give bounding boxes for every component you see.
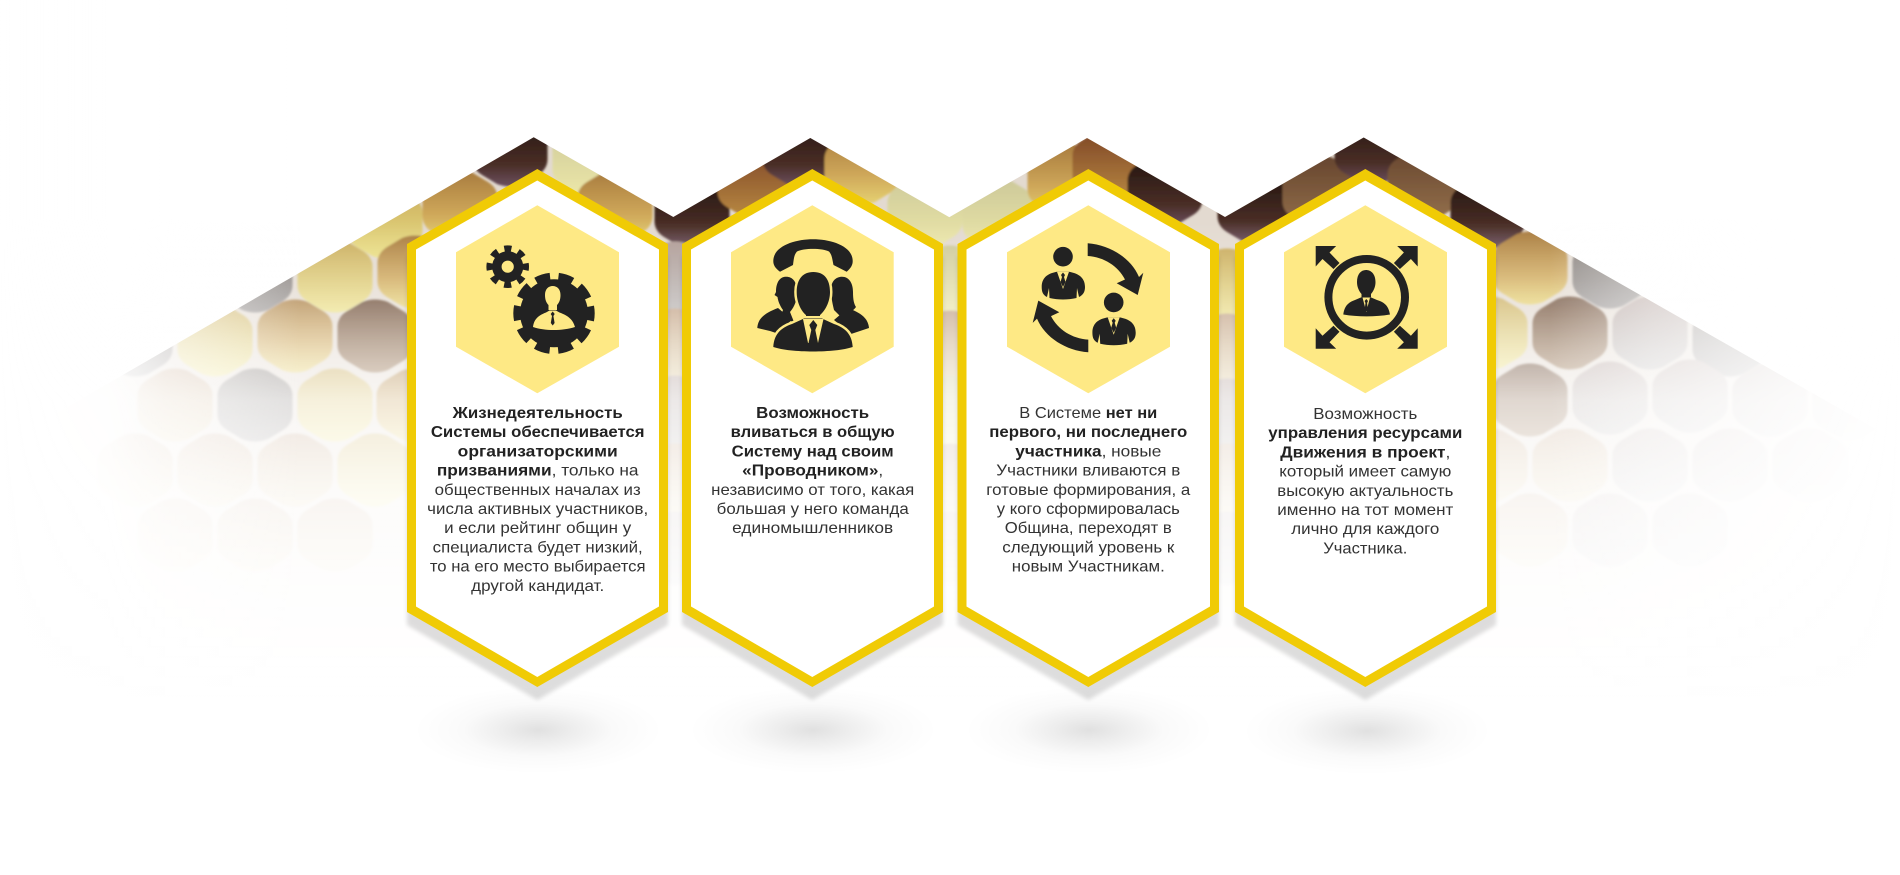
background: honeycomb photo roof [124,137,1784,686]
frame shadow [1235,182,1496,700]
text block: «Проводником» , [742,463,883,480]
text block: лично для каждого [1291,521,1439,538]
text block: единомышленников [732,520,893,537]
text block: первого, ни последнего [989,424,1188,441]
text block: участника , новые [1015,443,1161,460]
text block: призваниями , только на [437,463,639,480]
text block: готовые формирования, а [986,482,1190,499]
text block: большая у него команда [717,501,909,518]
text block: Возможность [756,405,869,422]
text block: Жизнедеятельность [452,405,623,422]
text block: организаторскими [458,443,618,460]
text block: общественных началах из [435,482,641,499]
icon background hexagon [1284,205,1447,393]
hexagonal frame [682,169,943,687]
text block: независимо от того, какая [711,482,914,499]
text block [427,405,648,595]
text block: у кого сформировалась [997,501,1180,518]
icon: team with telephone [757,239,869,352]
text block: высокую актуальность [1277,483,1453,500]
frame shadow [407,182,668,700]
text block: Системы обеспечивается [431,424,645,441]
text block: специалиста будет низкий, [433,539,643,556]
text block: который имеет самую [1279,464,1451,481]
icon background hexagon [1007,205,1170,393]
text block: числа активных участников, [427,501,648,518]
text block [711,405,914,537]
text block: Возможность [1313,406,1417,423]
text block: Участника. [1323,540,1407,557]
text block: Община, переходят в [1005,520,1172,537]
hexagonal frame [407,169,668,687]
icon: gears with person [490,249,590,350]
text block: и если рейтинг общин у [444,520,631,537]
icon: person in ring with four arrows [1316,246,1418,349]
text block [1268,406,1462,557]
text block [986,405,1190,576]
panel: system life [407,169,668,700]
panel: resource management [1235,169,1496,700]
frame shadow [682,182,943,700]
panel: no first or last participant [958,169,1219,700]
text block: новым Участникам. [1012,559,1165,576]
text block: следующий уровень к [1002,539,1175,556]
panel: joining under conductor [682,169,943,700]
floor shadows [413,686,1492,775]
icon background hexagon [731,205,894,393]
text block: именно на тот момент [1277,502,1454,519]
text block: управления ресурсами [1268,425,1462,442]
text block: Движения в проект , [1280,444,1450,461]
text block: вливаться в общую [731,424,895,441]
icon background hexagon [456,205,619,393]
text block: Систему над своим [732,443,894,460]
frame shadow [958,182,1219,700]
text block: другой кандидат. [471,578,604,595]
text block: то на его место выбирается [430,559,646,576]
text block: В Системе нет ни [1019,405,1157,422]
text block: Участники вливаются в [996,463,1180,480]
icon: two people with cycling arrows [1033,243,1143,352]
hexagonal frame [1235,169,1496,687]
hexagonal frame [958,169,1219,687]
